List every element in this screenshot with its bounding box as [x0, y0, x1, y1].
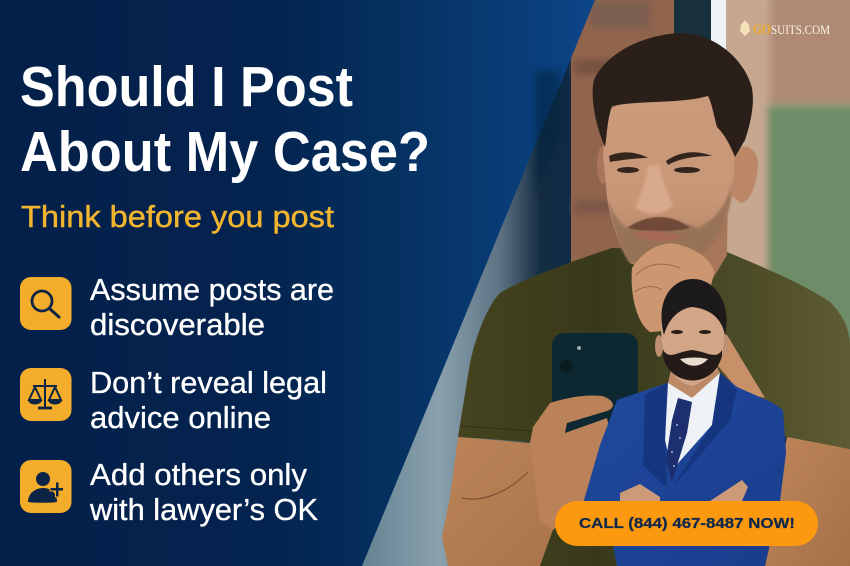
man: right ear: [731, 146, 758, 203]
attorney portrait: [584, 279, 786, 566]
man: phone: [552, 333, 638, 463]
man: forearm to chin: [700, 335, 765, 398]
man: finger lines: [634, 264, 680, 292]
icon: add user: [20, 460, 72, 513]
man: arm crease: [462, 472, 528, 499]
man: neck: [625, 185, 728, 300]
man: hair: [593, 33, 753, 157]
attorney: head: [661, 300, 724, 386]
man: left ear: [597, 146, 609, 184]
logo: shield icon: [740, 20, 750, 36]
tip text: Assume posts are: [90, 272, 334, 307]
tip text: [89, 457, 318, 527]
logo: wordmark: [753, 22, 830, 38]
photo background: blurred room and window: [340, 0, 850, 566]
icon: scales of justice: [20, 368, 72, 421]
attorney: lapels: [643, 373, 737, 488]
man: right arm: [765, 436, 850, 566]
logo: GoSuits.com: [740, 20, 830, 38]
attorney: beard: [663, 350, 722, 380]
man: face: [603, 94, 735, 267]
man: left arm and hand: [442, 396, 612, 566]
attorney: crossed hands: [620, 480, 748, 501]
man: fingers holding phone: [530, 395, 613, 530]
attorney: suit jacket: [584, 373, 786, 566]
tip text: Don’t reveal legal: [90, 365, 327, 400]
man: eyebrows and eyes: [609, 152, 712, 173]
man: nose: [636, 165, 673, 214]
tip text: with lawyer’s OK: [89, 492, 318, 527]
tip text: advice online: [90, 400, 271, 435]
tip: posts are discoverable: [20, 272, 334, 342]
attorney: navy tie: [666, 398, 692, 482]
title: Should I Post: [20, 55, 353, 119]
attorney: white shirt: [665, 373, 720, 470]
attorney: smile: [680, 358, 708, 366]
man: sleeve hem: [460, 426, 532, 431]
title: [20, 55, 430, 184]
logo: wordmark: SUITS.COM: [771, 22, 830, 37]
tip text: [90, 365, 327, 435]
attorney: hair: [662, 279, 727, 335]
attorney: left ear: [655, 335, 663, 357]
tip: add others: [20, 457, 318, 527]
tip: legal advice: [20, 365, 327, 435]
tip text: discoverable: [90, 307, 265, 342]
man: olive t-shirt: [458, 248, 850, 566]
title: About My Case?: [20, 120, 430, 184]
man: moustache and lip: [627, 217, 690, 231]
man: fist on chin: [632, 244, 714, 332]
call to action button: [555, 501, 818, 546]
logo: wordmark: GO: [753, 22, 771, 38]
icon: magnifying glass: [20, 277, 72, 330]
call to action button: CALL (844) 467-8487 NOW!: [579, 516, 795, 532]
man: stubble: [607, 180, 733, 263]
attorney: neck: [668, 365, 720, 398]
tip text: Add others only: [90, 457, 307, 492]
subtitle: Think before you post: [21, 199, 334, 234]
attorney: right ear: [722, 334, 728, 354]
left navy panel with diagonal edge: [0, 0, 595, 566]
tip text: [90, 272, 334, 342]
man looking at phone: [442, 33, 850, 566]
attorney: eyes: [671, 330, 711, 334]
